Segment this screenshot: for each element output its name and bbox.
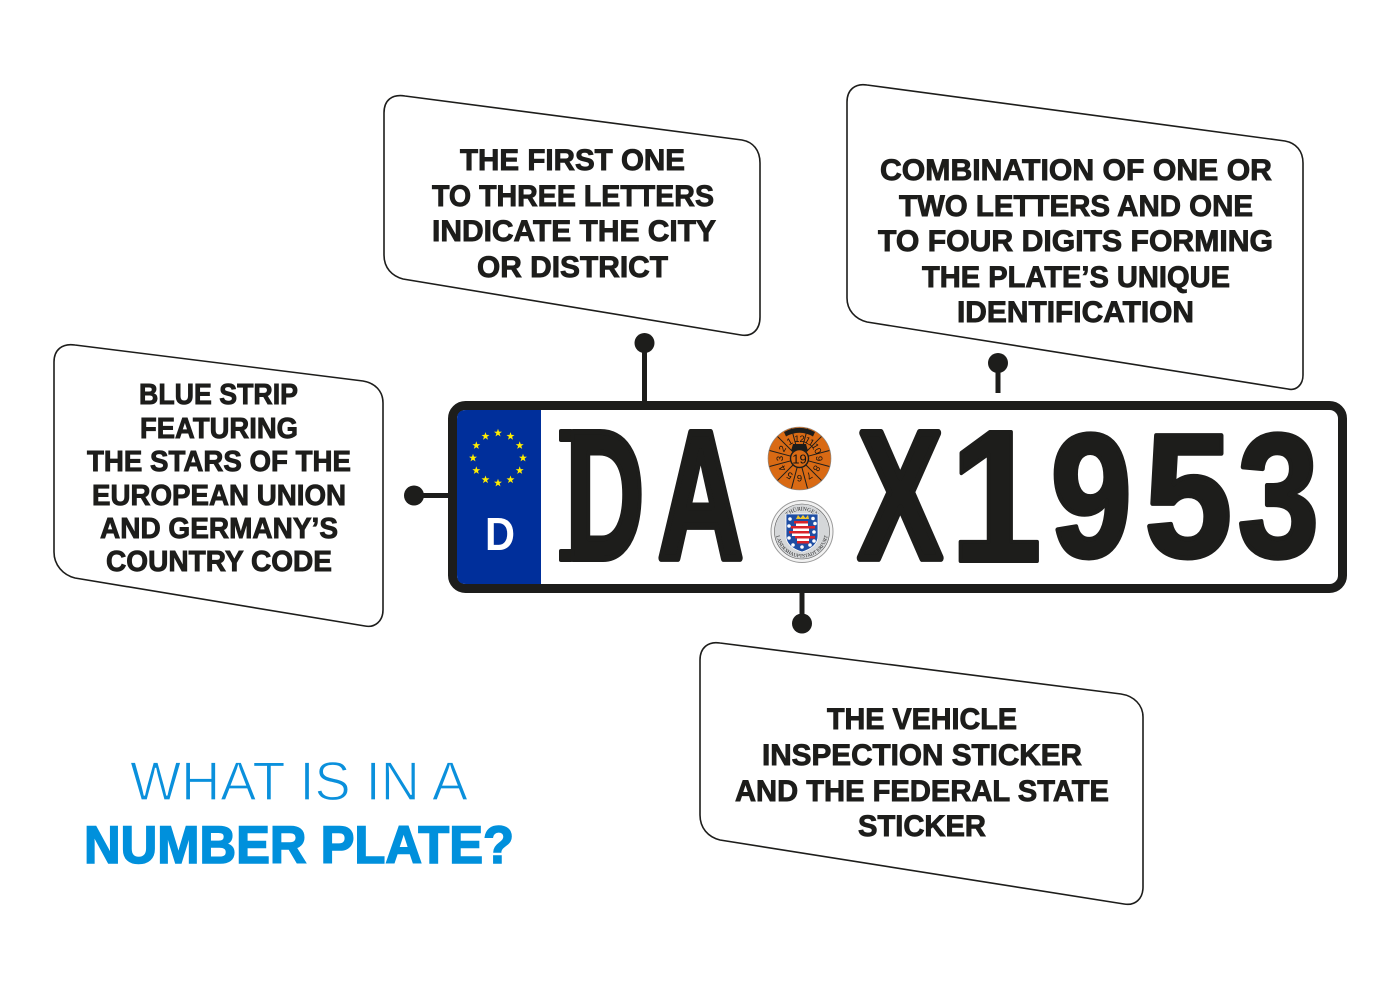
connector: blue strip callout to plate: [404, 486, 450, 506]
callout: unique identification: THE PLATE’S UNIQUE: [922, 261, 1230, 294]
plate letters: 3: [1238, 399, 1319, 594]
callout: blue strip: BLUE STRIP: [139, 379, 298, 411]
inspection sticker: 2: [777, 444, 789, 454]
connector: city callout to plate: [634, 333, 654, 403]
plate letters: X: [858, 395, 942, 598]
number plate: [448, 392, 1347, 601]
inspection sticker: 4: [777, 463, 789, 473]
inspection sticker: 11: [802, 435, 816, 449]
plate letters: 1: [950, 392, 1042, 601]
callout: blue strip: COUNTRY CODE: [106, 546, 332, 578]
plate letters: [559, 392, 1319, 601]
blue EU strip: D: [485, 508, 515, 560]
callout: city or district: TO THREE LETTERS: [432, 180, 714, 213]
inspection sticker: 12: [794, 434, 805, 445]
federal state sticker: [770, 500, 834, 563]
blue EU strip: [457, 410, 541, 584]
inspection sticker: 6: [797, 472, 802, 483]
title: [84, 750, 514, 875]
callout: city or district: OR DISTRICT: [477, 251, 668, 284]
callout: stickers: AND THE FEDERAL STATE: [735, 775, 1109, 808]
plate letters: D: [565, 394, 645, 599]
federal state sticker: THÜRINGEN: [785, 506, 819, 514]
callout: blue strip: [54, 345, 383, 626]
callout: unique identification: IDENTIFICATION: [957, 296, 1194, 329]
callout: city or district: [384, 96, 760, 335]
inspection sticker: 5: [785, 469, 795, 481]
title: WHAT IS IN A: [130, 750, 468, 812]
inspection sticker: 8: [810, 463, 822, 473]
callout: blue strip: EUROPEAN UNION: [92, 480, 346, 512]
callout: city or district: INDICATE THE CITY: [432, 215, 716, 248]
callout: blue strip: FEATURING: [140, 413, 298, 445]
callout: stickers: INSPECTION STICKER: [762, 739, 1082, 772]
inspection sticker: [768, 427, 831, 490]
callout: blue strip: AND GERMANY’S: [100, 513, 338, 545]
plate letters: 5: [1144, 399, 1232, 594]
callout: city or district: THE FIRST ONE: [460, 144, 685, 177]
inspection sticker: 7: [804, 469, 814, 481]
callout: unique identification: TO FOUR DIGITS FORMING: [878, 225, 1273, 258]
callout: blue strip: THE STARS OF THE: [87, 446, 351, 478]
callout: unique identification: TWO LETTERS AND ONE: [899, 190, 1253, 223]
title: NUMBER PLATE?: [84, 816, 514, 875]
connector: identification callout to plate: [988, 353, 1008, 393]
connector: stickers callout to plate: [792, 591, 812, 634]
inspection sticker: 3: [775, 456, 786, 461]
callout: stickers: THE VEHICLE: [827, 703, 1017, 736]
inspection sticker: 10: [809, 442, 823, 456]
inspection sticker: 9: [813, 456, 824, 461]
plate letters: 9: [1050, 399, 1132, 594]
inspection sticker: 1: [785, 436, 795, 448]
callout: unique identification: COMBINATION OF ONE OR: [880, 154, 1272, 187]
inspection sticker: 19: [792, 451, 807, 466]
callout: stickers: [700, 643, 1143, 904]
plate letters: A: [658, 394, 743, 597]
callout: unique identification: [847, 85, 1303, 389]
callout: stickers: STICKER: [858, 810, 986, 843]
federal state sticker: LANDESHAUPTSTADT ERFURT: [776, 535, 828, 558]
